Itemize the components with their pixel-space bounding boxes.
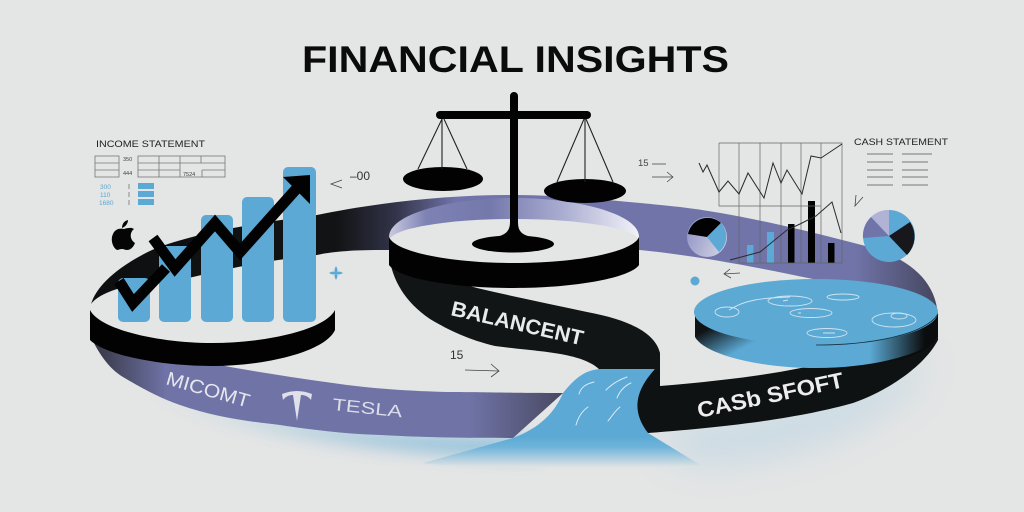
label: CASb SFOFT: CASb SFOFT — [695, 367, 846, 423]
small dot and arrow — [690, 269, 740, 286]
icon: apple logo — [112, 220, 135, 250]
income statement block: 444 — [123, 171, 132, 177]
annotation: 15 bottom: 15 — [450, 348, 464, 362]
left disc — [89, 277, 335, 366]
annotation: 15 bottom — [450, 348, 499, 377]
heading: CASH STATEMENT — [854, 137, 948, 148]
disc band — [389, 237, 639, 288]
income statement block: 350 — [123, 157, 132, 163]
pool ripples — [715, 294, 916, 338]
bar chart — [118, 167, 316, 322]
income statement block: 110 — [100, 192, 111, 199]
annotation: 15 top — [638, 158, 673, 182]
bars — [747, 245, 754, 263]
cash statement block — [854, 137, 948, 206]
growth arrow — [119, 175, 310, 303]
pie chart small — [687, 217, 727, 257]
central disc with scale — [389, 92, 639, 288]
income statement block: 1680 — [99, 200, 114, 207]
blue glow under ribbon — [125, 355, 925, 462]
grid — [719, 143, 842, 263]
income statement block: 7524 — [183, 172, 195, 178]
disc rim — [389, 198, 639, 263]
income statement block — [95, 139, 225, 207]
label: MICOMT: MICOMT — [164, 369, 252, 413]
front ribbon: purple — [90, 335, 563, 438]
icon: sparkle — [329, 266, 343, 280]
tables — [95, 156, 225, 177]
disc surface — [389, 219, 639, 263]
annotation: -00: –00 — [350, 169, 370, 183]
label: BALANCENT: BALANCENT — [449, 297, 586, 350]
disc surface — [89, 277, 335, 343]
water stream — [423, 369, 702, 468]
S ribbon: Balancent — [389, 255, 660, 372]
line and bar chart — [699, 143, 842, 263]
blue figures: 300 — [100, 184, 111, 191]
annotation: -00 — [331, 169, 370, 188]
icon: Tesla logo — [282, 391, 312, 421]
right ribbon: Cash Sfoft — [637, 320, 938, 433]
back ribbon: black to purple — [90, 195, 938, 320]
annotation: 15 top: 15 — [638, 158, 649, 169]
title: FINANCIAL INSIGHTS — [302, 39, 729, 80]
disc surface — [694, 279, 938, 345]
blue pool disc — [694, 279, 938, 368]
disc side — [695, 312, 938, 368]
scale — [403, 92, 626, 252]
pie chart large — [863, 210, 915, 262]
label: TESLA: TESLA — [332, 395, 404, 421]
heading: INCOME STATEMENT — [96, 139, 205, 150]
lines — [699, 144, 842, 198]
disc band — [90, 310, 335, 366]
